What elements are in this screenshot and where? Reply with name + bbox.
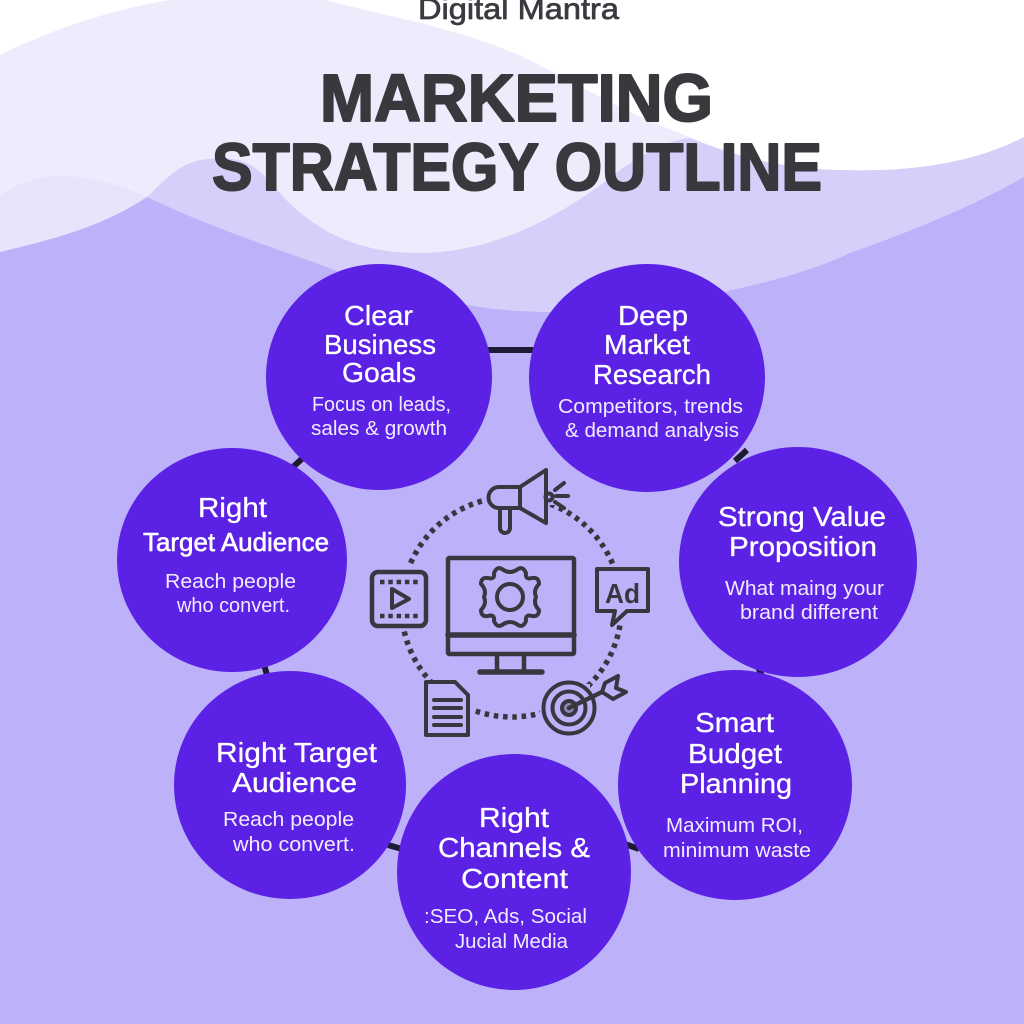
panel: strong value proposition: brand different [740, 601, 878, 624]
panel: clear business goals: Clear [344, 300, 413, 331]
panel: deep market research: Deep [618, 300, 688, 331]
panel: deep market research [529, 264, 765, 492]
title [212, 61, 822, 205]
panel: clear business goals [266, 264, 492, 490]
panel: clear business goals: Goals [342, 357, 416, 388]
icon: monitor with gear [448, 558, 574, 672]
panel: clear business goals: Focus on leads, [312, 393, 451, 416]
icon: ad speech bubble: Ad [605, 578, 640, 609]
panel: right target audience lower: who convert. [232, 833, 355, 856]
panel: right channels and content: Channels & [438, 832, 590, 863]
panel: strong value proposition: Proposition [729, 531, 877, 562]
panel: right target audience upper: Reach people [165, 570, 296, 593]
panel: right target audience upper: who convert. [176, 594, 290, 617]
panel: right channels and content: Jucial Media [455, 930, 569, 953]
icon: document [426, 682, 468, 735]
panel: deep market research: Market [604, 329, 690, 360]
panel: right target audience lower: Reach people [223, 808, 354, 831]
panel: right target audience lower: Right Target [216, 737, 377, 768]
panel: deep market research: Competitors, trends [558, 395, 743, 418]
panel: smart budget planning [618, 670, 852, 900]
panel: deep market research: & demand analysis [565, 419, 739, 442]
panel: right target audience upper: Target Audience [143, 527, 329, 557]
title: STRATEGY OUTLINE [212, 130, 822, 205]
panel: right channels and content: :SEO, Ads, Social [424, 905, 587, 928]
panel: right channels and content: Content [461, 863, 568, 894]
panel: clear business goals: sales & growth [311, 417, 447, 440]
panel: smart budget planning: Budget [688, 738, 782, 769]
panel: clear business goals: Business [324, 329, 436, 360]
panel: deep market research: Research [593, 359, 711, 390]
title: MARKETING [320, 61, 713, 136]
panel: strong value proposition [679, 447, 917, 677]
panel: smart budget planning: Maximum ROI, [666, 814, 803, 837]
panel: right target audience upper [117, 448, 347, 672]
panel: strong value proposition: What maing your [725, 577, 884, 600]
panel: smart budget planning: Planning [680, 768, 792, 799]
icon: megaphone [489, 470, 568, 533]
panel: right channels and content: Right [479, 802, 549, 833]
icon: ad speech bubble [597, 569, 648, 625]
panel: smart budget planning: minimum waste [663, 839, 811, 862]
icon: target with arrow [544, 676, 626, 734]
panel: smart budget planning: Smart [695, 707, 774, 738]
panel: right channels and content [397, 754, 631, 990]
panel: right target audience lower: Audience [232, 767, 357, 798]
icon: video player [372, 572, 426, 626]
connectors between circles [264, 350, 763, 849]
panel: strong value proposition: Strong Value [718, 501, 886, 532]
panel: right target audience upper: Right [198, 492, 267, 523]
dotted ring [368, 464, 652, 736]
panel: right target audience lower [174, 671, 406, 899]
